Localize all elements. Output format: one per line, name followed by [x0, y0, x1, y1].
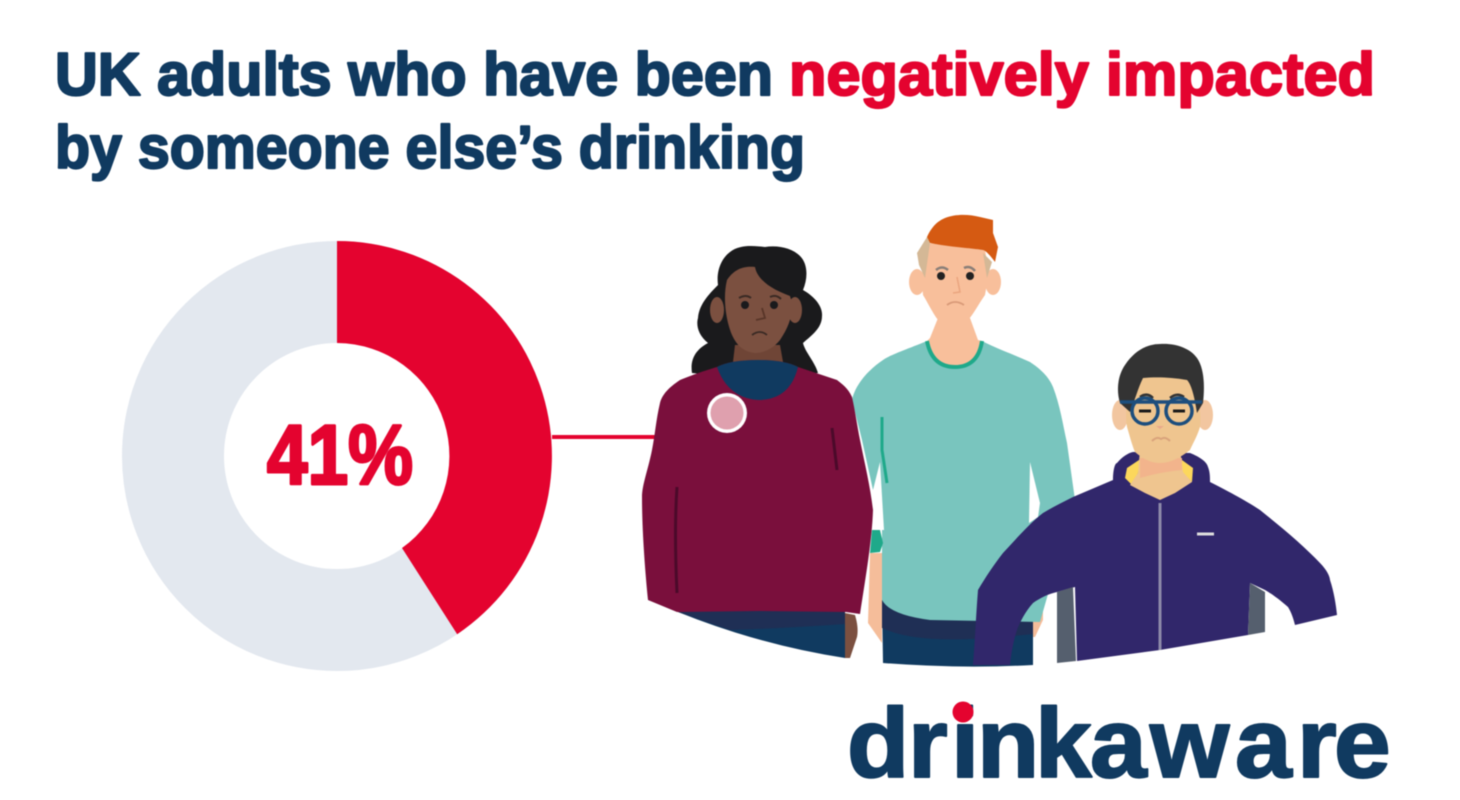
- logo dot: [952, 702, 974, 722]
- title: by someone else’s drinking: [55, 114, 805, 181]
- badge on sweater: [707, 393, 747, 433]
- title: [55, 41, 1375, 181]
- donut chart: 41%: 41%: [267, 408, 413, 502]
- person: woman in maroon sweater: [642, 246, 873, 658]
- title: UK adults who have been: [55, 41, 773, 108]
- connector line: [552, 435, 656, 439]
- donut chart: 41%: [173, 241, 552, 634]
- person: man in purple jacket: [973, 344, 1337, 665]
- title: negatively impacted: [789, 41, 1375, 108]
- person: man in teal sweater: [852, 215, 1075, 667]
- drinkaware logo: drinkaware: [847, 689, 1391, 799]
